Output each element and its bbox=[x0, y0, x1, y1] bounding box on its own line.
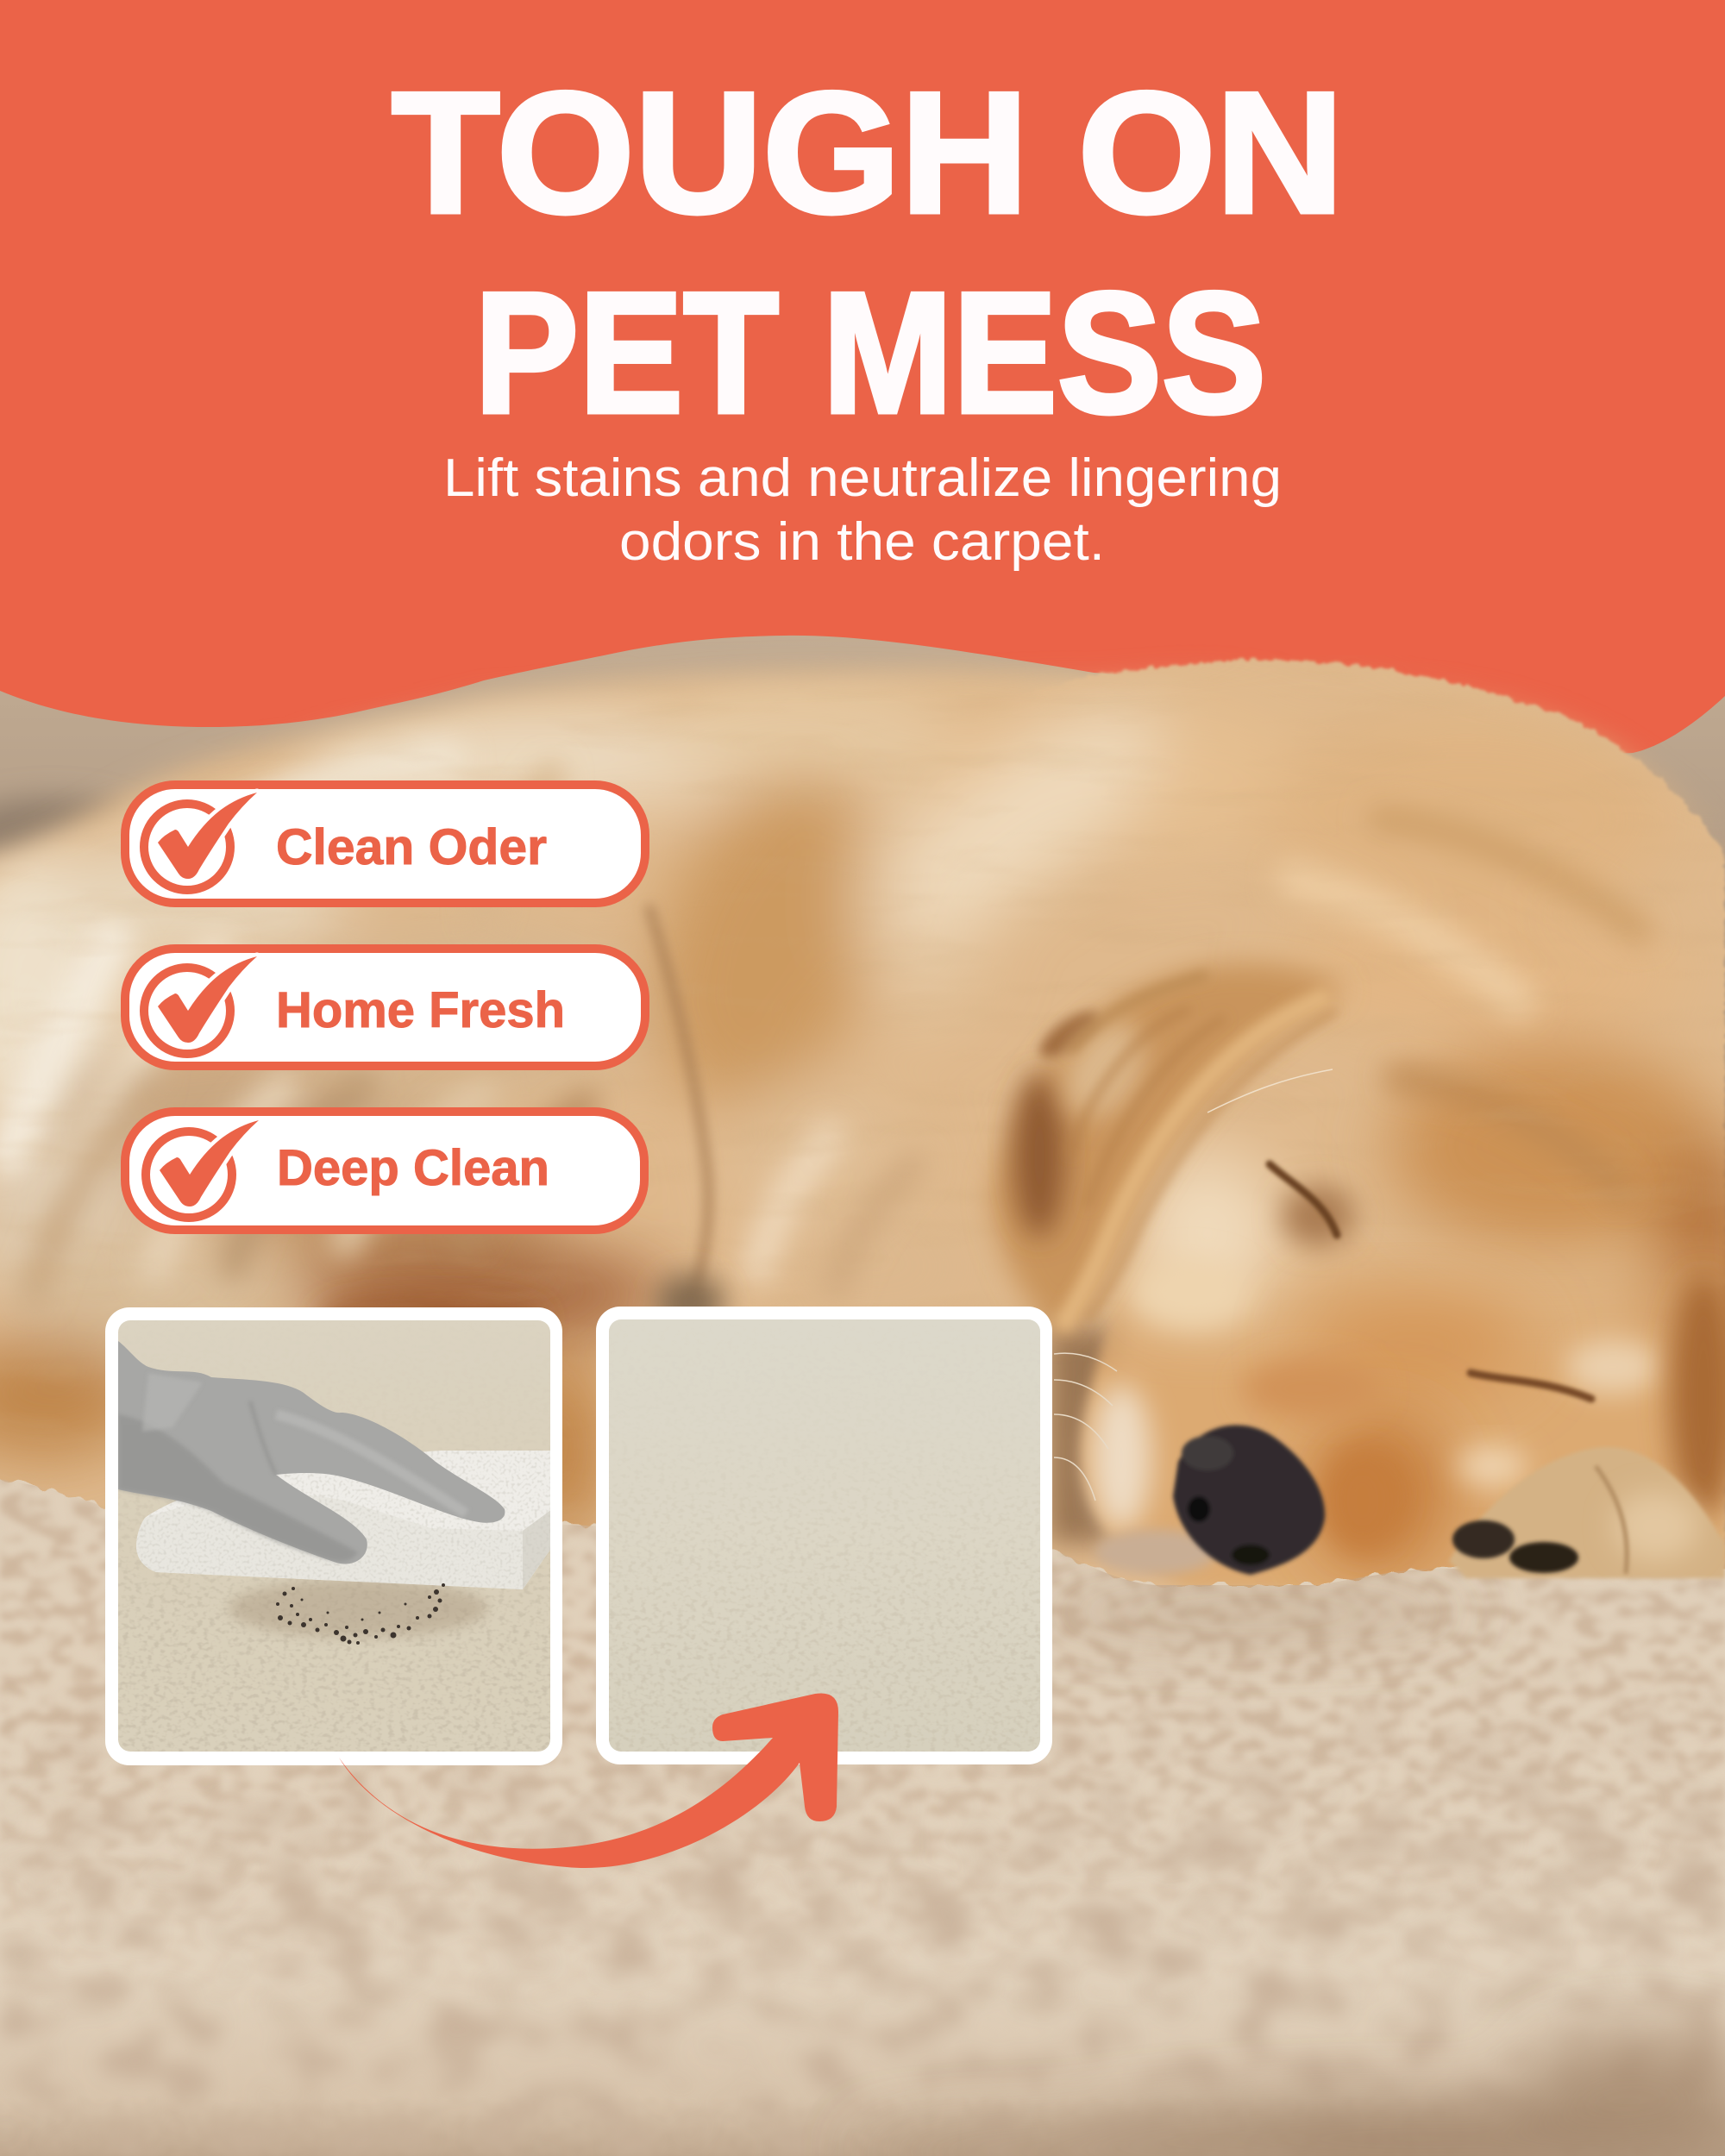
dog head and muzzle bbox=[1081, 1151, 1725, 1595]
dog body soft left silhouette bbox=[0, 668, 1208, 1639]
nose bbox=[1173, 1425, 1325, 1575]
headline bbox=[392, 57, 1344, 449]
subheading bbox=[443, 448, 1282, 572]
left eye bbox=[1270, 1164, 1354, 1247]
icon: check mark bbox=[146, 1120, 259, 1218]
photo background: room behind the dog bbox=[0, 604, 1725, 1639]
panel: before, gloved hand cleaning stain bbox=[105, 1307, 562, 1765]
panel: after, clean carpet bbox=[596, 1307, 1052, 1764]
subheading: odors in the carpet. bbox=[619, 512, 1105, 572]
badge: Deep Clean bbox=[125, 1112, 644, 1230]
arrow: before to after bbox=[339, 1693, 838, 1868]
icon: check mark bbox=[144, 793, 257, 890]
headline: PET MESS bbox=[474, 257, 1266, 449]
dog face details bbox=[1173, 1164, 1725, 1578]
glove bbox=[118, 1341, 505, 1564]
label: Clean Oder bbox=[276, 819, 547, 875]
right eye bbox=[1471, 1373, 1591, 1399]
dog whiskers shadow bbox=[1048, 1328, 1117, 1544]
fur strands bbox=[9, 759, 1639, 1294]
dog whiskers bbox=[1054, 1069, 1333, 1501]
towel bbox=[129, 1449, 556, 1595]
badge: Home Fresh bbox=[125, 949, 645, 1066]
stain shading bbox=[229, 1579, 487, 1638]
texture: fur strands bbox=[17, 761, 1076, 1152]
label: Home Fresh bbox=[276, 982, 565, 1038]
headline: TOUGH ON bbox=[392, 57, 1344, 249]
photo: golden retriever lying on the carpet bbox=[0, 655, 1725, 1639]
icon: check mark bbox=[144, 956, 257, 1054]
photo: beige carpet bbox=[0, 1466, 1725, 2156]
label: Deep Clean bbox=[277, 1140, 549, 1196]
paw bbox=[1449, 1447, 1725, 1578]
orange wave header background bbox=[0, 0, 1725, 753]
dog ear bbox=[992, 963, 1346, 1337]
badge: Clean Oder bbox=[125, 785, 645, 903]
subheading: Lift stains and neutralize lingering bbox=[443, 448, 1282, 508]
stain speckles bbox=[276, 1583, 445, 1645]
